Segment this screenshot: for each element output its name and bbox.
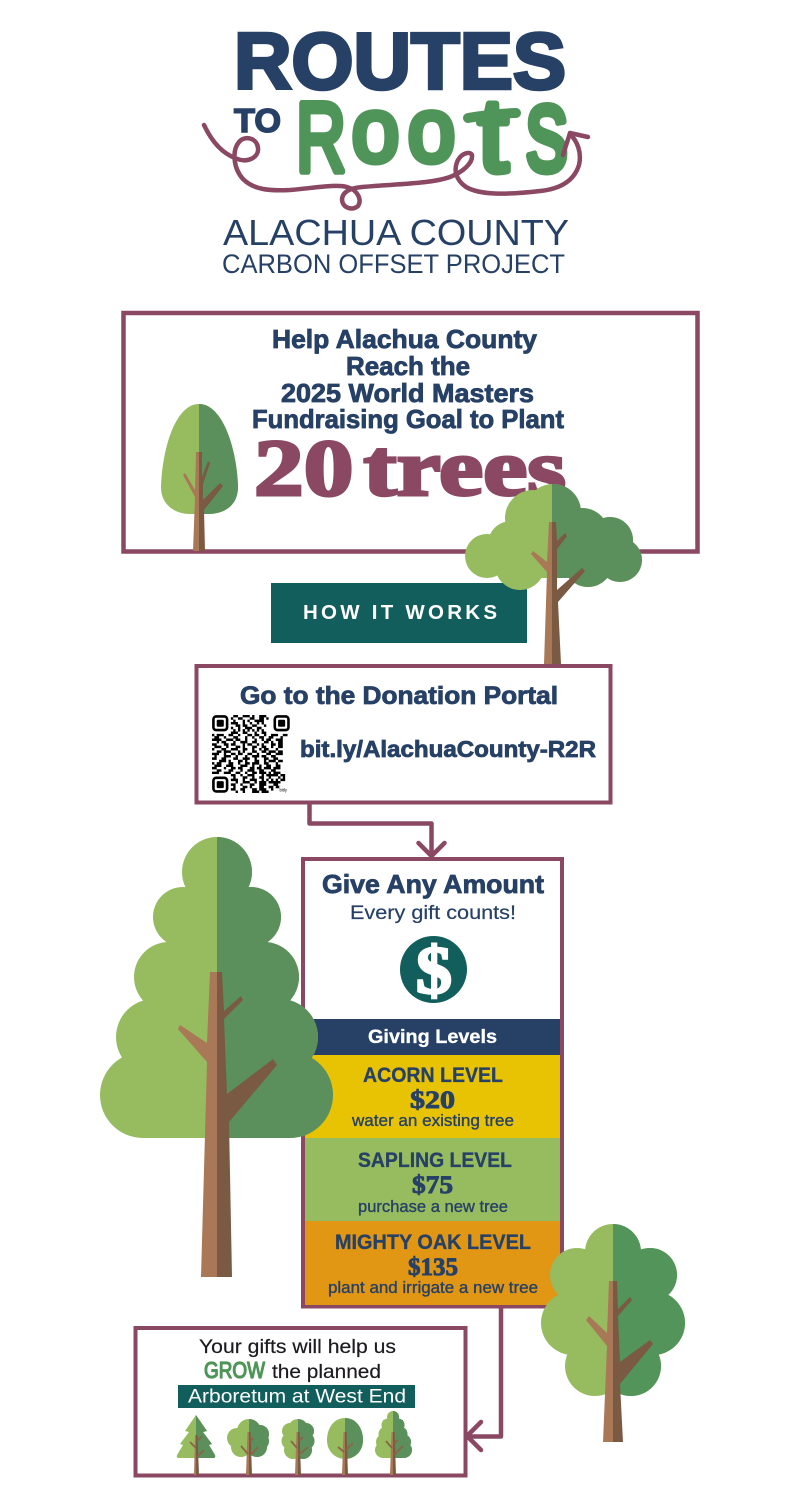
icon: dollar circle	[400, 932, 467, 1008]
goal heading: 2025 World Masters	[281, 378, 534, 408]
logo word: Roots: t	[478, 78, 508, 194]
small tree 1	[177, 1415, 215, 1475]
t crossbar stroke	[468, 113, 516, 118]
logo word: Roots: o	[352, 81, 399, 181]
panel: fundraising goal	[124, 313, 698, 552]
level: sapling	[305, 1138, 560, 1221]
arrow: give to arboretum	[467, 1306, 501, 1450]
small tree 2	[227, 1419, 269, 1475]
logo word: Roots: R	[296, 82, 346, 192]
planned text: the planned	[272, 1361, 381, 1383]
level: sapling: purchase a new tree	[358, 1198, 508, 1216]
word: GROW: GROW	[204, 1357, 265, 1383]
give subheading: Every gift counts!	[350, 902, 516, 924]
giving levels header	[305, 1019, 560, 1055]
subtitle: Alachua County: ALACHUA COUNTY	[223, 212, 569, 253]
giving levels header: Giving Levels	[368, 1027, 497, 1048]
icon: round tree top right	[465, 484, 642, 664]
icon: large tree	[100, 837, 333, 1277]
level: mighty oak	[305, 1221, 560, 1305]
arrow: portal to give	[310, 804, 444, 856]
goal heading: Fundraising Goal to Plant	[252, 404, 564, 434]
panel: give any amount	[303, 859, 562, 1306]
panel border	[124, 313, 698, 552]
small tree 3	[282, 1419, 314, 1475]
panel: donation portal	[196, 666, 610, 802]
level: acorn	[305, 1055, 560, 1138]
logo word: Roots: o	[408, 81, 455, 181]
arboretum banner: Arboretum at West End	[188, 1386, 406, 1408]
icon: round tree bottom right	[541, 1224, 685, 1442]
goal heading: Help Alachua County	[272, 324, 538, 354]
logo	[204, 16, 588, 279]
icon: egg tree	[161, 404, 238, 551]
level: acorn: ACORN LEVEL	[363, 1064, 503, 1087]
goal heading: Reach the	[346, 351, 470, 381]
button: how it works	[271, 583, 527, 643]
small tree 4	[327, 1418, 363, 1475]
gifts text: Your gifts will help us	[199, 1336, 396, 1358]
icon: dollar circle: $	[416, 932, 452, 1008]
logo word: ROUTES: ROUTES	[234, 16, 566, 106]
level: mighty oak: MIGHTY OAK LEVEL	[335, 1231, 531, 1254]
logo word: Roots: s	[526, 61, 568, 197]
logo word: TO: TO	[234, 102, 281, 139]
level: mighty oak: plant and irrigate a new tree	[328, 1279, 538, 1297]
small trees row	[177, 1411, 412, 1475]
give heading: Give Any Amount	[322, 869, 544, 899]
panel border	[136, 1328, 466, 1476]
level: mighty oak: $135	[408, 1254, 458, 1281]
logo swirl arrow	[204, 125, 588, 208]
QR code: bitly	[279, 787, 288, 792]
panel: arboretum	[136, 1328, 466, 1476]
small tree 5	[375, 1411, 412, 1475]
portal link: bit.ly/AlachuaCounty-R2R	[300, 736, 596, 762]
goal heading	[252, 324, 564, 434]
level: sapling: SAPLING LEVEL	[358, 1149, 512, 1172]
level: sapling: $75	[412, 1172, 453, 1199]
subtitle: Carbon Offset Project: CARBON OFFSET PROJECT	[222, 249, 565, 279]
infographic canvas	[100, 31, 700, 1478]
QR code	[212, 716, 290, 793]
level: acorn: $20	[410, 1087, 455, 1114]
panel border	[303, 859, 562, 1306]
goal number: 20 trees: 20 trees	[254, 425, 566, 513]
button: how it works: HOW IT WORKS	[303, 601, 497, 624]
level: acorn: water an existing tree	[351, 1112, 514, 1130]
portal heading: Go to the Donation Portal	[240, 682, 558, 710]
